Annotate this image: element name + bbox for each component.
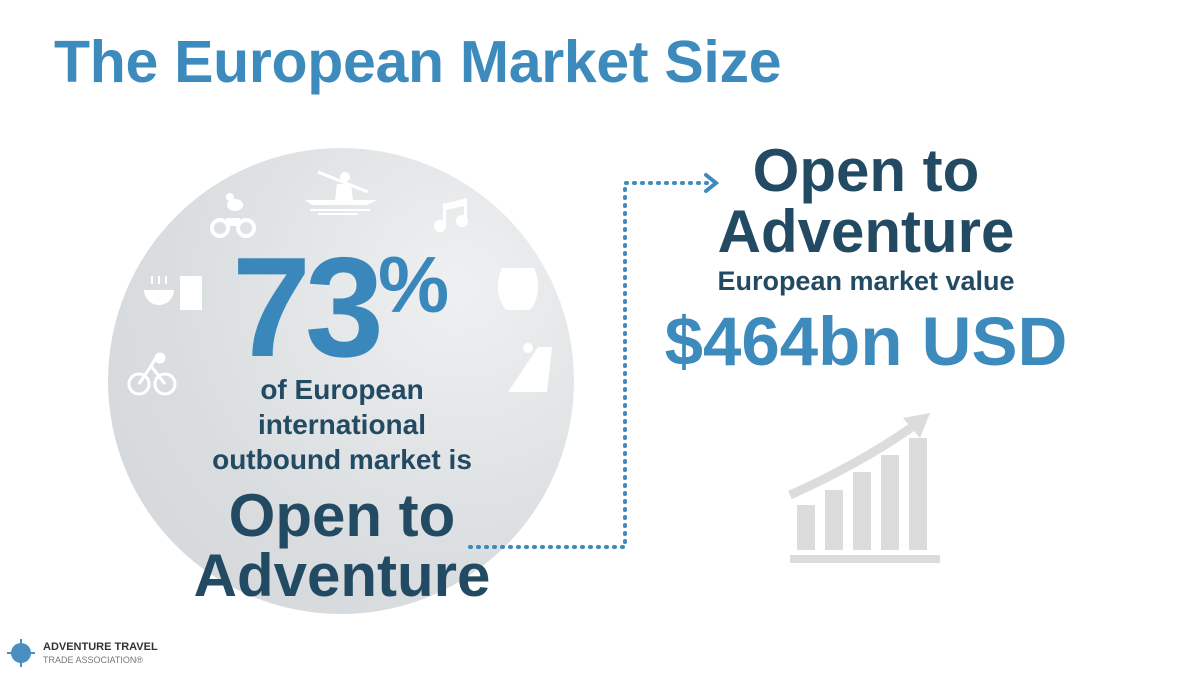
text: right headline: Open to bbox=[753, 137, 979, 204]
text: description: international bbox=[258, 409, 426, 440]
text: right headline bbox=[718, 137, 1014, 265]
icon: climber bbox=[508, 343, 552, 392]
logo bbox=[7, 639, 158, 667]
icon: cyclist bbox=[129, 354, 175, 394]
text: right headline: Adventure bbox=[718, 198, 1014, 265]
logo: ADVENTURE TRAVEL bbox=[43, 641, 158, 653]
icon: music bbox=[434, 198, 468, 232]
text: market value label: European market value bbox=[717, 266, 1015, 296]
icon: pot bbox=[498, 268, 538, 310]
icon: growth chart bbox=[788, 413, 940, 563]
icon: bowl bbox=[144, 276, 202, 310]
panel: circle bbox=[108, 148, 574, 614]
icon: binoculars bird bbox=[212, 193, 254, 236]
text: description: of European bbox=[260, 374, 424, 405]
title: The European Market Size bbox=[54, 29, 781, 95]
stat: 73%: 73% bbox=[232, 228, 449, 387]
stat: $464bn: $464bn USD bbox=[665, 303, 1067, 380]
text: Open to Adventure: Open to bbox=[229, 482, 455, 549]
text: Open to Adventure: Adventure bbox=[194, 542, 490, 609]
icon: kayak bbox=[305, 172, 377, 214]
logo: TRADE ASSOCIATION® bbox=[43, 655, 143, 665]
text: description: outbound market is bbox=[212, 444, 472, 475]
text: description bbox=[212, 374, 472, 475]
text: Open to Adventure bbox=[194, 482, 490, 609]
